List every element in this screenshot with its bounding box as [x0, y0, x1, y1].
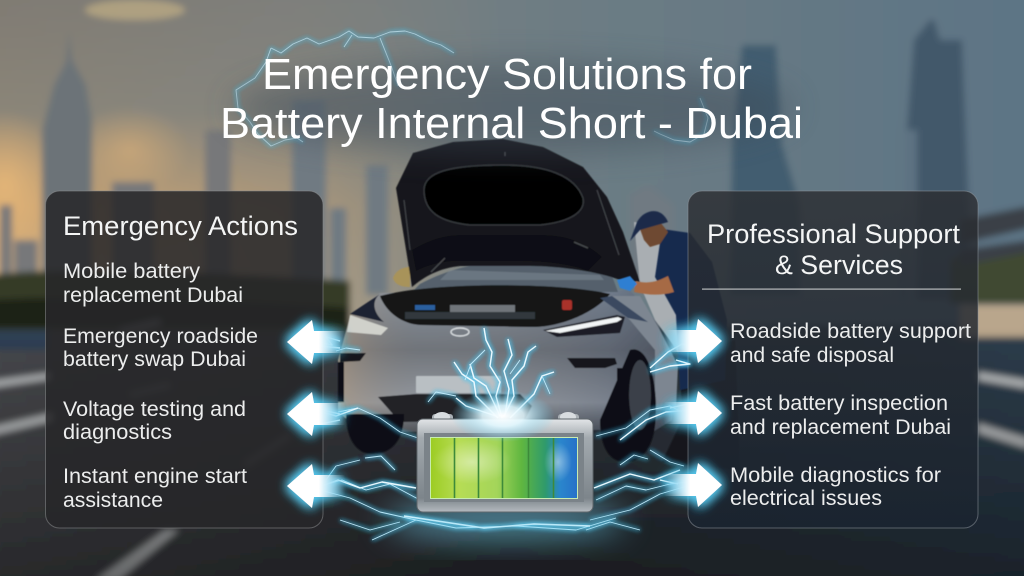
left arrows: [287, 320, 345, 508]
item: voltage testing: [63, 397, 246, 444]
number plate: [416, 376, 501, 393]
windshield: [412, 262, 618, 292]
arm: [634, 276, 674, 295]
item: mobile battery replacement: replacement Dubai: [63, 283, 243, 307]
item: voltage testing: Voltage testing and: [63, 397, 246, 421]
item: mobile diagnostics: electrical issues: [730, 486, 882, 510]
headlights: [347, 315, 388, 335]
item: mobile battery replacement: Mobile battery: [63, 259, 200, 283]
arrow 3: [287, 464, 345, 508]
item: roadside battery swap: Emergency roadside: [63, 324, 258, 348]
right arrows: [664, 319, 722, 507]
engine bay: [380, 285, 610, 327]
item: roadside support and disposal: and safe disposal: [730, 343, 894, 367]
item: inspection and replacement: [730, 391, 951, 439]
wheels: [346, 414, 404, 454]
lightning arc around title: [236, 31, 708, 146]
head: [640, 222, 668, 247]
arrow 2: [287, 392, 345, 436]
hood lifted: [396, 139, 640, 287]
heading: professional support and services: Professional Support: [707, 219, 960, 249]
item: engine start assistance: assistance: [63, 488, 163, 512]
item: inspection and replacement: and replacement Dubai: [730, 415, 951, 439]
title: [220, 50, 803, 153]
item: roadside battery swap: battery swap Dubai: [63, 347, 246, 371]
item: engine start assistance: [63, 464, 247, 512]
legs: [662, 340, 740, 470]
item: engine start assistance: Instant engine start: [63, 464, 247, 488]
logo: [451, 328, 469, 336]
battery glow: [385, 500, 625, 540]
arrow 1: [664, 319, 722, 363]
title: Emergency Solutions for: [262, 50, 752, 99]
torso: [655, 229, 727, 390]
car with open hood: [338, 139, 684, 462]
title: Battery Internal Short - Dubai: [220, 99, 803, 148]
terminals: [432, 412, 579, 423]
car body: [338, 290, 675, 440]
panel: professional support: [688, 191, 978, 528]
item: roadside support and disposal: [730, 319, 971, 367]
item: mobile diagnostics: [730, 463, 941, 510]
item: voltage testing: diagnostics: [63, 420, 172, 444]
lightning: car and battery discharge: [310, 328, 696, 540]
heading: professional support and services: & Services: [775, 250, 903, 280]
item: mobile battery replacement: [63, 259, 243, 307]
battery: [385, 390, 625, 540]
grille: [378, 394, 532, 422]
heading: professional support and services: [707, 219, 960, 280]
case: [417, 419, 593, 512]
item: roadside support and disposal: Roadside battery support: [730, 319, 971, 343]
arrow 2: [664, 391, 722, 435]
item: roadside battery swap: [63, 324, 258, 371]
car side glass behind mechanic: [634, 222, 684, 360]
arrow 1: [287, 320, 345, 364]
arrow 3: [664, 463, 722, 507]
cap: [630, 211, 668, 241]
mechanic leaning over the engine: [617, 211, 740, 470]
cells: [430, 437, 578, 499]
heading: emergency actions: Emergency Actions: [63, 211, 298, 241]
top flash: [451, 390, 555, 442]
item: mobile diagnostics: Mobile diagnostics for: [730, 463, 941, 487]
item: inspection and replacement: Fast battery inspection: [730, 391, 948, 415]
panel: emergency actions: [46, 191, 323, 528]
lower vents: [340, 353, 617, 368]
glove: [617, 276, 637, 291]
